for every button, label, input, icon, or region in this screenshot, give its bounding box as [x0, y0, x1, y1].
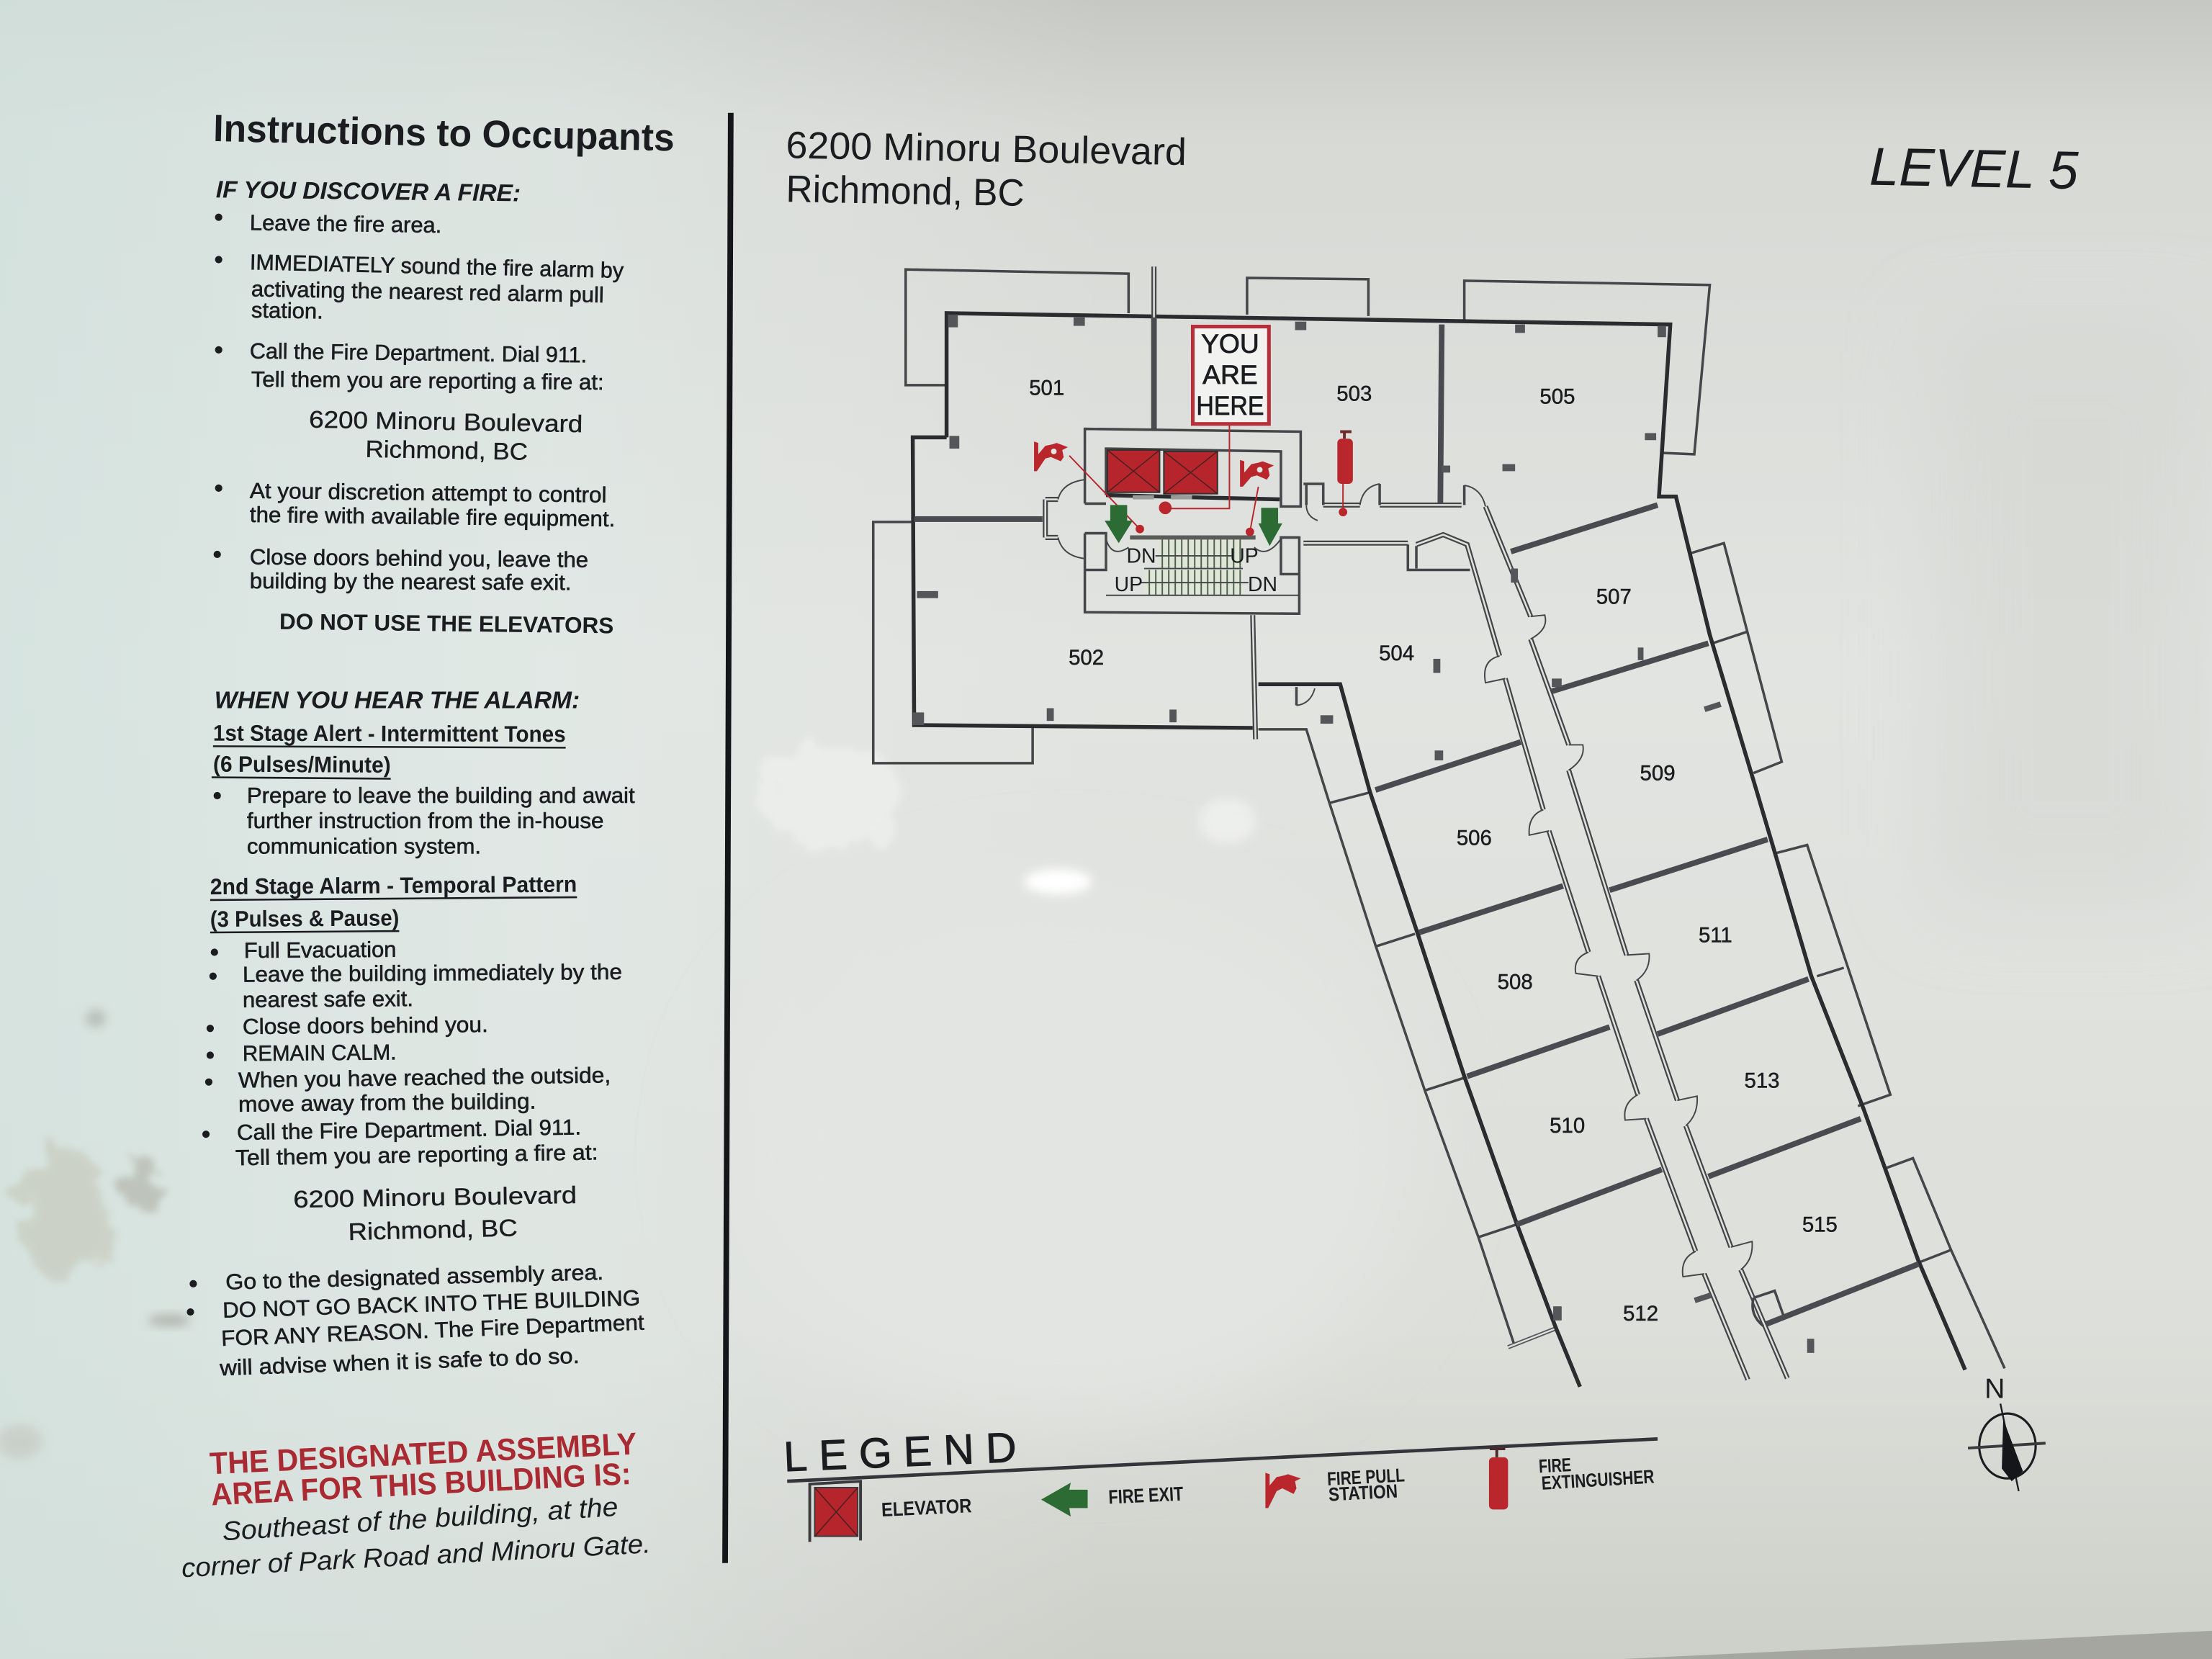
building address: 6200 Minoru Boulevard — [786, 124, 1187, 174]
panel: if you discover a fire: DO NOT USE THE ELEVATORS — [279, 609, 614, 638]
panel: if you discover a fire: the fire with available fire equipment. — [250, 503, 615, 531]
callout: designated assembly area: Southeast of the building, at the — [221, 1491, 619, 1546]
panel: when you hear the alarm: When you have reached the outside, — [238, 1064, 611, 1093]
panel: when you hear the alarm: FOR ANY REASON. The Fire Department — [221, 1310, 645, 1351]
panel: when you hear the alarm: communication system. — [247, 835, 481, 858]
panel: when you hear the alarm: Close doors behind you. — [243, 1013, 488, 1039]
panel: when you hear the alarm: Tell them you are reporting a fire at: — [235, 1141, 598, 1170]
legend item: fire extinguisher: EXTINGUISHER — [1541, 1465, 1655, 1494]
callout: designated assembly area: THE DESIGNATED ASSEMBLY — [209, 1426, 638, 1481]
room labels: 515 — [1802, 1213, 1838, 1236]
icon: north compass: N — [1984, 1374, 2005, 1405]
panel: when you hear the alarm: Richmond, BC — [348, 1215, 518, 1246]
room labels: 512 — [1623, 1302, 1658, 1326]
room labels — [1029, 377, 1838, 1326]
level label: LEVEL 5 — [1869, 137, 2080, 200]
subheading: hear the alarm: WHEN YOU HEAR THE ALARM: — [215, 688, 580, 714]
panel: if you discover a fire: station. — [251, 299, 323, 324]
stair labels: DN — [1126, 545, 1156, 568]
room labels: 511 — [1699, 924, 1732, 948]
stair labels — [1115, 545, 1277, 596]
callout: designated assembly area: AREA FOR THIS BUILDING IS: — [210, 1457, 631, 1512]
stairs — [1106, 537, 1299, 596]
legend item: fire exit: FIRE EXIT — [1108, 1483, 1184, 1508]
room labels: 504 — [1379, 642, 1414, 665]
elevators — [1107, 450, 1218, 500]
callout: you are here — [1192, 327, 1269, 424]
callout: you are here: ARE — [1202, 359, 1258, 390]
room labels: 505 — [1539, 385, 1575, 408]
exterior walls — [913, 266, 1965, 1387]
legend item: fire pull station: STATION — [1328, 1480, 1398, 1506]
panel: when you hear the alarm: (3 Pulses & Pause) — [210, 905, 399, 932]
core: elevator lobby — [1058, 429, 1485, 706]
callout: you are here: YOU — [1201, 328, 1259, 359]
panel: when you hear the alarm: Prepare to leave the building and await — [247, 784, 635, 808]
subheading: discover a fire: IF YOU DISCOVER A FIRE: — [216, 176, 521, 207]
panel: when you hear the alarm: (6 Pulses/Minute) — [213, 752, 391, 778]
building address: Richmond, BC — [786, 168, 1025, 215]
panel: if you discover a fire — [214, 176, 624, 638]
panel: if you discover a fire: Leave the fire area. — [250, 211, 442, 238]
panel: if you discover a fire: Tell them you are reporting a fire at: — [251, 368, 604, 395]
legend — [783, 1424, 1658, 1542]
stair labels: UP — [1230, 545, 1259, 568]
panel: if you discover a fire: Richmond, BC — [365, 436, 528, 466]
legend item: fire pull station — [1265, 1464, 1406, 1508]
panel: when you hear the alarm: Full Evacuation — [244, 938, 397, 963]
panel: if you discover a fire: activating the nearest red alarm pull — [251, 277, 604, 307]
room labels: 508 — [1498, 970, 1533, 994]
floor plan — [873, 266, 2005, 1387]
legend item: fire exit — [1041, 1483, 1184, 1516]
room labels: 507 — [1596, 585, 1632, 609]
icon: pull station right — [1240, 460, 1274, 487]
room labels: 502 — [1069, 646, 1104, 670]
panel: when you hear the alarm: nearest safe exit. — [243, 987, 413, 1012]
room labels: 503 — [1336, 382, 1372, 405]
stair labels: DN — [1248, 573, 1277, 596]
corridor walls — [1046, 500, 1787, 1380]
icon: fire extinguisher — [1337, 432, 1353, 484]
panel: when you hear the alarm: 6200 Minoru Boulevard — [293, 1182, 577, 1213]
panel: when you hear the alarm: Call the Fire Department. Dial 911. — [237, 1116, 581, 1145]
panel: when you hear the alarm: DO NOT GO BACK INTO THE BUILDING — [222, 1287, 640, 1323]
icon: fire exit arrows — [1105, 505, 1282, 546]
panel: when you hear the alarm: move away from the building. — [238, 1090, 536, 1117]
panel: when you hear the alarm: Go to the designated assembly area. — [225, 1261, 604, 1295]
panel: when you hear the alarm: Leave the building immediately by the — [243, 961, 622, 987]
room labels: 513 — [1745, 1069, 1780, 1093]
legend title: LEGEND — [783, 1424, 1017, 1480]
icon: pull station left — [1034, 441, 1068, 471]
panel: when you hear the alarm: 2nd Stage Alarm - Temporal Pattern — [210, 872, 577, 899]
callout: designated assembly area — [181, 1426, 652, 1583]
panel: if you discover a fire: At your discretion attempt to control — [250, 480, 607, 508]
callout: designated assembly area: corner of Park Road and Minoru Gate. — [181, 1528, 652, 1583]
panel: when you hear the alarm — [186, 688, 645, 1380]
red leader lines and dots — [1069, 423, 1347, 536]
room labels: 509 — [1640, 761, 1676, 785]
panel: if you discover a fire: building by the nearest safe exit. — [250, 570, 572, 595]
legend item: fire extinguisher — [1489, 1449, 1655, 1509]
legend item: elevator — [810, 1481, 972, 1542]
room labels: 506 — [1457, 827, 1492, 850]
panel: when you hear the alarm: further instruction from the in-house — [247, 809, 604, 833]
room labels: 510 — [1550, 1114, 1585, 1138]
panel: if you discover a fire: Close doors behind you, leave the — [250, 546, 588, 572]
structural columns — [913, 315, 1815, 1353]
heading: instructions to occupants: Instructions to Occupants — [213, 107, 675, 159]
interior partition walls — [914, 318, 1918, 1325]
legend item: fire extinguisher: FIRE — [1538, 1454, 1572, 1477]
panel: if you discover a fire: 6200 Minoru Boulevard — [309, 407, 583, 438]
panel: if you discover a fire: IMMEDIATELY sound the fire alarm by — [250, 251, 624, 283]
building address — [786, 124, 1187, 215]
panel: when you hear the alarm: 1st Stage Alert - Intermittent Tones — [213, 721, 566, 747]
panel: when you hear the alarm: will advise when it is safe to do so. — [219, 1344, 580, 1380]
stair labels: UP — [1115, 573, 1143, 596]
legend item: elevator: ELEVATOR — [881, 1494, 972, 1521]
legend item: fire pull station: FIRE PULL — [1326, 1464, 1406, 1490]
icon: north compass — [1968, 1374, 2046, 1491]
balconies and thin outlines — [873, 269, 2005, 1368]
callout: you are here: HERE — [1196, 390, 1264, 421]
room labels: 501 — [1029, 377, 1064, 400]
panel: if you discover a fire: Call the Fire Department. Dial 911. — [250, 340, 587, 367]
panel: when you hear the alarm: REMAIN CALM. — [243, 1040, 397, 1066]
